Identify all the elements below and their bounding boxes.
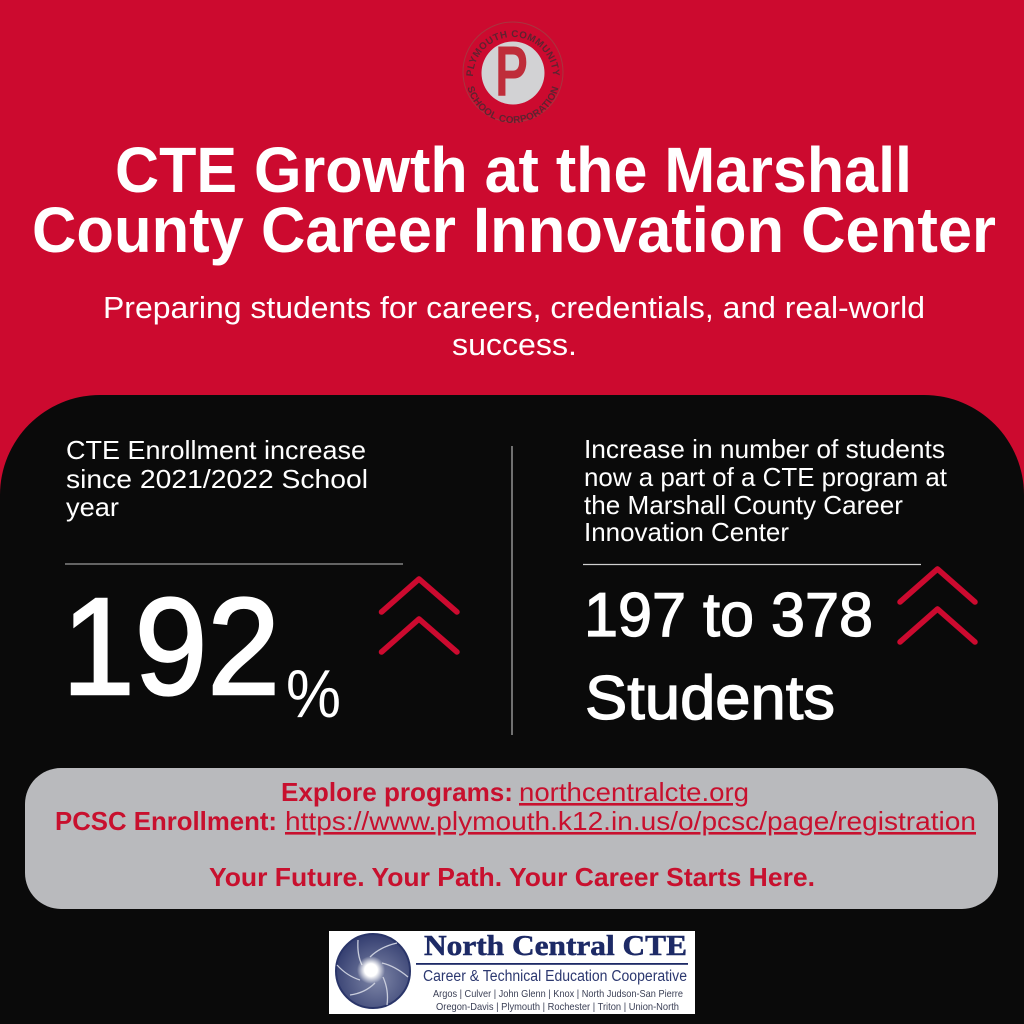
explore programs link [281, 777, 749, 807]
icon: double up chevron [900, 569, 975, 642]
logo: North Central CTE: Oregon-Davis | Plymouth | Rochester | Triton | Union-North [436, 1001, 679, 1013]
panel: enrollment increase stat [62, 435, 457, 732]
enrollment link: https://www.plymouth.k12.in.us/o/pcsc/page/registration [285, 806, 976, 836]
subtitle: Preparing students for careers, credentials, and real-world [103, 290, 925, 325]
icon: camera aperture [336, 934, 410, 1008]
student stat value: 197 to 378 [584, 581, 873, 650]
enrollment link: PCSC Enrollment: [55, 806, 277, 836]
student stat description [584, 434, 948, 547]
student stat value: Students [585, 664, 835, 733]
subtitle: success. [452, 327, 577, 362]
logo: Plymouth Community School Corporation seal: SCHOOL CORPORATION [468, 86, 558, 124]
panel: links callout [25, 768, 998, 909]
student stat value [584, 581, 873, 733]
student stat description: now a part of a CTE program at [584, 462, 948, 492]
panel: black statistics background [0, 395, 1024, 1024]
enrollment stat description: CTE Enrollment increase [66, 435, 366, 465]
enrollment stat description: since 2021/2022 School [66, 464, 368, 494]
logo: Plymouth Community School Corporation seal [462, 22, 564, 124]
enrollment stat value: 192 [62, 570, 280, 724]
student stat description: Increase in number of students [584, 434, 945, 464]
logo: North Central CTE: North Central CTE [424, 931, 687, 962]
panel: student growth stat [583, 434, 975, 733]
logo: North Central CTE: Argos | Culver | John Glenn | Knox | North Judson-San Pierre [433, 988, 683, 1000]
logo: North Central CTE [329, 931, 695, 1014]
logo: Plymouth Community School Corporation seal: PLYMOUTH COMMUNITY [466, 30, 560, 76]
title: County Career Innovation Center [32, 194, 996, 266]
student stat description: Innovation Center [584, 517, 789, 547]
explore programs link: northcentralcte.org [519, 777, 749, 807]
icon: double up chevron [382, 579, 457, 652]
enrollment stat value: % [286, 656, 341, 732]
enrollment stat description: year [66, 492, 119, 522]
enrollment link [55, 806, 976, 836]
logo: North Central CTE: Career & Technical Education Cooperative [423, 968, 687, 985]
subtitle [103, 290, 925, 362]
logo: Plymouth Community School Corporation seal: P [495, 33, 528, 112]
tagline: Your Future. Your Path. Your Career Starts Here. [209, 862, 815, 892]
student stat description: the Marshall County Career [584, 490, 903, 520]
title: CTE Growth at the Marshall [115, 134, 912, 206]
explore programs link: Explore programs: [281, 777, 513, 807]
enrollment stat description [66, 435, 368, 522]
title [32, 134, 996, 266]
